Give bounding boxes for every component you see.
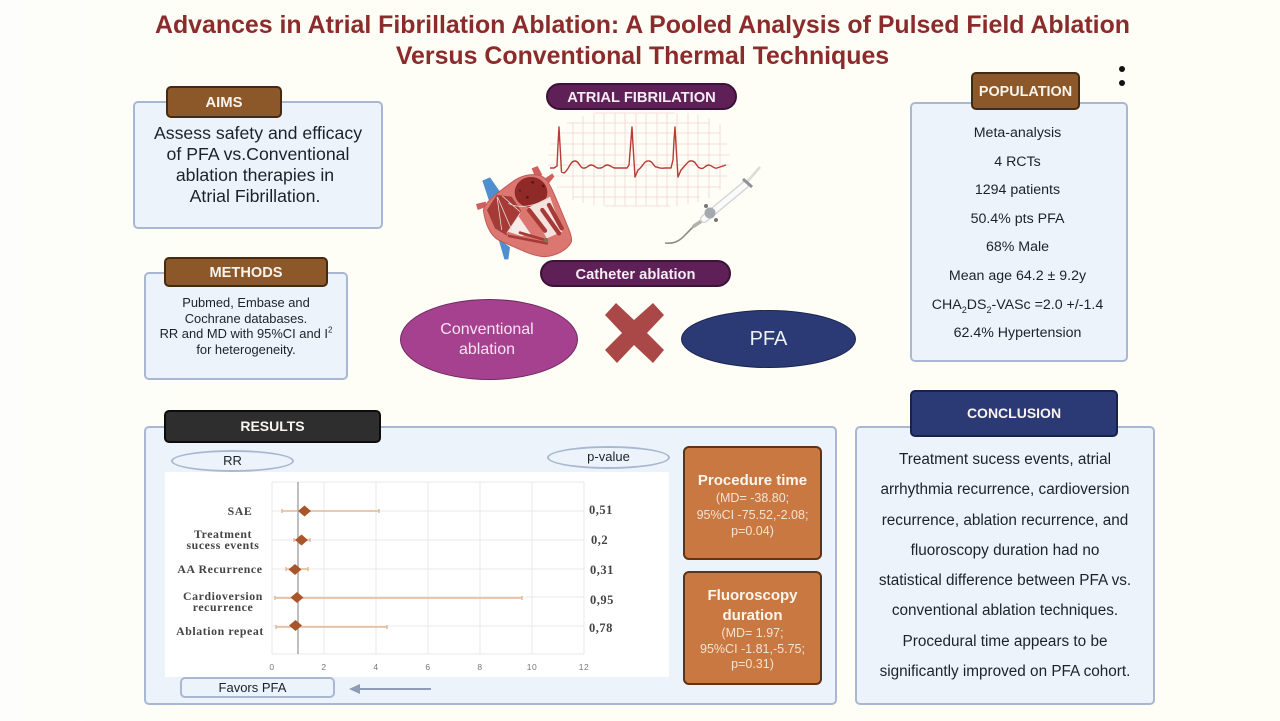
population list: 4 RCTs — [994, 154, 1041, 170]
p values: 0,78 — [589, 621, 613, 635]
axis ticks: 4 — [373, 662, 379, 672]
favors PFA label: Favors PFA — [219, 680, 286, 695]
population list: 62.4% Hypertension — [954, 325, 1081, 341]
icon: red cross — [605, 303, 664, 363]
row labels: sucess events — [186, 538, 260, 552]
forest plot intervals — [275, 509, 522, 629]
population list: Mean age 64.2 ± 9.2y — [949, 268, 1086, 284]
conclusion text: significantly improved on PFA cohort. — [880, 663, 1130, 680]
RR label: RR — [223, 453, 242, 468]
methods text — [160, 295, 332, 356]
methods text: for heterogeneity. — [196, 342, 296, 356]
population list: Meta-analysis — [974, 125, 1061, 141]
aims text: ablation therapies in — [176, 165, 334, 185]
row labels: AA Recurrence — [177, 562, 263, 576]
conclusion text: fluoroscopy duration had no — [911, 542, 1099, 559]
fluoroscopy box: duration — [722, 607, 782, 624]
icon: vertical dots — [1119, 66, 1125, 86]
heading: catheter ablation: Catheter ablation — [576, 266, 695, 282]
aims text: Assess safety and efficacy — [154, 123, 362, 143]
population list: 1294 patients — [975, 182, 1060, 198]
p-value label: p-value — [587, 449, 630, 464]
title: Advances in Atrial Fibrillation Ablation: A Pooled Analysis of Pulsed Field Ablation — [155, 11, 1130, 39]
aims heading: AIMS — [206, 95, 242, 111]
icon: catheter — [664, 166, 761, 244]
conventional ablation ellipse: ablation — [459, 341, 515, 358]
aims text — [154, 123, 362, 206]
axis ticks: 8 — [477, 662, 483, 672]
row labels: Cardioversion — [183, 589, 263, 603]
aims heading — [166, 86, 282, 118]
fluoroscopy box: p=0.31) — [731, 657, 774, 671]
panel: population — [910, 72, 1128, 362]
row labels: Ablation repeat — [176, 624, 264, 638]
axis ticks: 12 — [579, 662, 589, 672]
forest plot — [165, 472, 669, 677]
fluoroscopy box: (MD= 1.97; — [721, 626, 784, 640]
heading: atrial fibrilation — [546, 83, 737, 110]
conclusion text: Treatment sucess events, atrial — [899, 451, 1111, 468]
results heading — [164, 410, 381, 443]
aims text: of PFA vs.Conventional — [167, 144, 349, 164]
p values: 0,95 — [590, 593, 614, 607]
methods heading — [164, 257, 328, 287]
population list: 68% Male — [986, 239, 1049, 255]
fluoroscopy box: Fluoroscopy — [707, 587, 798, 604]
conclusion text: arrhythmia recurrence, cardioversion — [880, 481, 1130, 498]
row labels — [176, 504, 264, 638]
title: Versus Conventional Thermal Techniques — [396, 42, 889, 70]
panel: results — [144, 410, 837, 705]
axis ticks: 6 — [425, 662, 431, 672]
p values — [589, 503, 614, 635]
procedure time box — [683, 446, 822, 560]
chart: ECG trace — [548, 112, 730, 206]
row labels: recurrence — [193, 600, 253, 614]
p-value label — [547, 446, 670, 469]
population list: CHA2DS2-VASc =2.0 +/-1.4 — [932, 297, 1103, 314]
aims text: Atrial Fibrillation. — [190, 186, 320, 206]
RR label — [171, 450, 294, 472]
population heading: POPULATION — [979, 84, 1072, 100]
conclusion text — [879, 451, 1131, 680]
axis ticks — [269, 662, 589, 672]
procedure time box: (MD= -38.80; — [716, 491, 789, 505]
population list: 50.4% pts PFA — [971, 211, 1064, 227]
conclusion text: statistical difference between PFA vs. — [879, 572, 1131, 589]
methods heading: METHODS — [210, 265, 282, 281]
panel: conclusion — [855, 390, 1155, 705]
forest plot markers — [288, 506, 311, 631]
methods text: Cochrane databases. — [185, 310, 307, 326]
favors PFA label — [180, 677, 335, 698]
conventional ablation ellipse: Conventional — [440, 321, 534, 338]
results heading: RESULTS — [240, 418, 305, 434]
population list — [932, 125, 1103, 341]
fluoroscopy box — [683, 571, 822, 685]
fluoroscopy box: 95%CI -1.81,-5.75; — [700, 642, 805, 656]
p values: 0,31 — [590, 563, 614, 577]
p values: 0,51 — [589, 503, 613, 517]
procedure time box: Procedure time — [698, 472, 807, 489]
panel: methods — [144, 257, 348, 380]
axis ticks: 10 — [527, 662, 537, 672]
heading: atrial fibrilation: ATRIAL FIBRILATION — [567, 90, 716, 106]
conclusion text: recurrence, ablation recurrence, and — [882, 512, 1128, 529]
heading: catheter ablation — [540, 260, 731, 287]
procedure time box: p=0.04) — [731, 524, 774, 538]
population heading — [971, 72, 1080, 110]
conclusion text: Procedural time appears to be — [903, 633, 1107, 650]
title — [155, 11, 1130, 70]
row labels: Treatment — [194, 527, 252, 541]
procedure time box: 95%CI -75.52,-2.08; — [697, 508, 808, 522]
row labels: SAE — [228, 504, 252, 518]
methods text: RR and MD with 95%CI and I2 — [160, 326, 332, 341]
methods text: Pubmed, Embase and — [182, 295, 310, 310]
conclusion heading: CONCLUSION — [967, 404, 1061, 420]
conclusion heading — [910, 390, 1118, 437]
PFA ellipse: PFA — [750, 328, 787, 350]
axis ticks: 0 — [269, 662, 275, 672]
PFA ellipse — [681, 310, 856, 368]
panel: aims — [133, 86, 383, 229]
conclusion text: conventional ablation techniques. — [892, 602, 1118, 619]
conventional ablation ellipse — [400, 299, 578, 380]
icon: heart — [476, 166, 572, 260]
axis ticks: 2 — [321, 662, 327, 672]
arrow: favors PFA — [349, 684, 431, 694]
p values: 0,2 — [591, 533, 608, 547]
